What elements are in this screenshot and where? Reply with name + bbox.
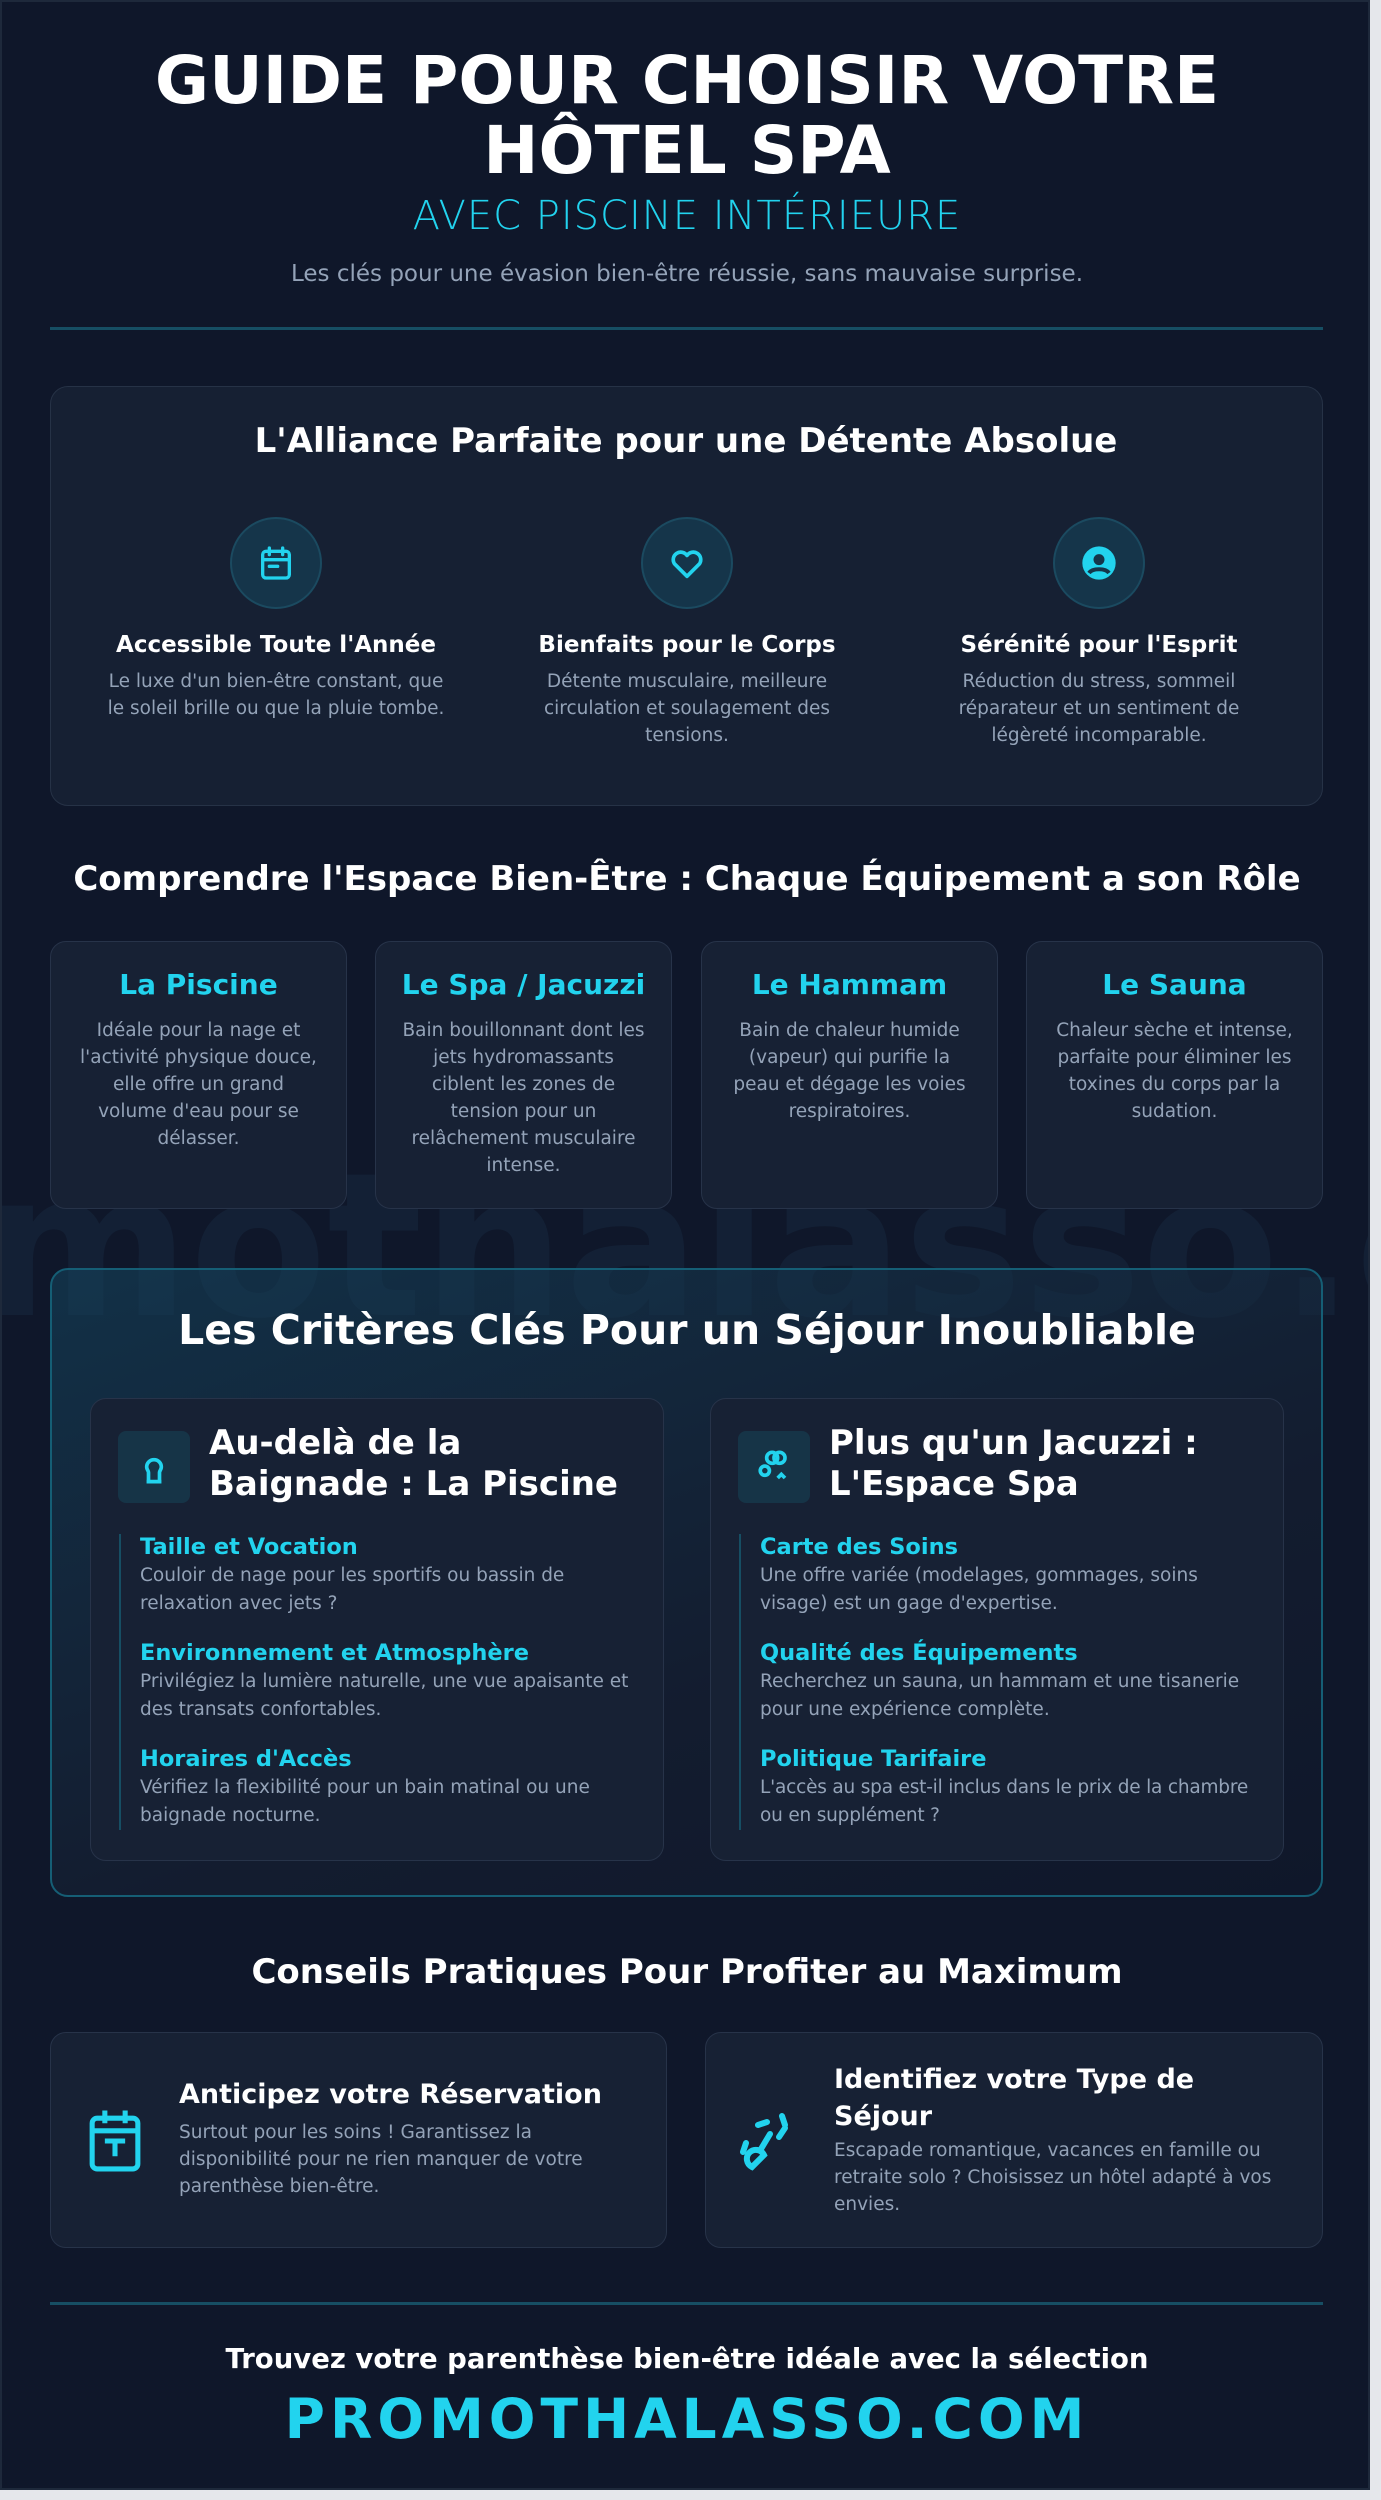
item: corps: Détente musculaire, meilleure circulation et soulagement des tensions. [544, 671, 830, 746]
card: sejour: Escapade romantique, vacances en famille ou retraite solo ? Choisissez un hôtel adapté à vos envies. [834, 2140, 1271, 2215]
list: Taille et Vocation [140, 1534, 358, 1560]
heading: espace: Comprendre l'Espace Bien-Être : Chaque Équipement a son Rôle [73, 859, 1301, 899]
item: corps: Bienfaits pour le Corps [538, 632, 836, 658]
subtitle: AVEC PISCINE INTÉRIEURE [413, 193, 961, 239]
list: Politique Tarifaire [760, 1746, 987, 1772]
card: piscine [50, 941, 347, 1209]
item: accessible [108, 517, 444, 719]
heading: Les Critères Clés Pour un Séjour Inoubliable [178, 1306, 1196, 1354]
subcard: spa [710, 1398, 1284, 1861]
icon: heart [641, 517, 733, 609]
heading: L'Alliance Parfaite pour une Détente Absolue [255, 421, 1117, 461]
list: Privilégiez la lumière naturelle, une vue apaisante et des transats confortables. [140, 1671, 628, 1720]
title [155, 42, 1219, 189]
list: Environnement et Atmosphère [140, 1640, 529, 1666]
card: spa: Bain bouillonnant dont les jets hydromassants ciblent les zones de tension pour un relâchement musculaire intense. [402, 1020, 645, 1176]
title: HÔTEL SPA [483, 112, 891, 189]
footer text: Trouvez votre parenthèse bien-être idéale avec la sélection [226, 2343, 1148, 2375]
card: spa: Le Spa / Jacuzzi [402, 968, 645, 1001]
subcard: piscine: Baignade : La Piscine [209, 1464, 618, 1504]
item: esprit: Réduction du stress, sommeil réparateur et un sentiment de légèreté incomparable. [959, 671, 1239, 746]
subcard: spa: Plus qu'un Jacuzzi : [829, 1423, 1198, 1463]
icon: spa [738, 1431, 810, 1503]
card: sauna: Chaleur sèche et intense, parfaite pour éliminer les toxines du corps par la sudation. [1056, 1020, 1293, 1122]
list: Recherchez un sauna, un hammam et une tisanerie pour une expérience complète. [760, 1671, 1239, 1720]
icon: calendar [90, 2110, 140, 2172]
list: Vérifiez la flexibilité pour un bain matinal ou une baignade nocturne. [140, 1777, 590, 1826]
title: GUIDE POUR CHOISIR VOTRE [155, 42, 1219, 119]
icon: calendar [230, 517, 322, 609]
card: reservation [50, 2032, 667, 2248]
heading: conseils: Conseils Pratiques Pour Profiter au Maximum [251, 1952, 1123, 1992]
list: Une offre variée (modelages, gommages, soins visage) est un gage d'expertise. [760, 1565, 1198, 1614]
list [119, 1534, 649, 1830]
icon: user [1053, 517, 1145, 609]
icon: pool [118, 1431, 190, 1503]
item: corps [538, 517, 836, 746]
card: sauna [1026, 941, 1323, 1209]
tagline: Les clés pour une évasion bien-être réussie, sans mauvaise surprise. [291, 261, 1083, 287]
panel: alliance [50, 386, 1323, 806]
item: accessible: Accessible Toute l'Année [116, 632, 436, 658]
footer brand: PROMOTHALASSO.COM [285, 2387, 1089, 2451]
card: spa [375, 941, 672, 1209]
card: sauna: Le Sauna [1102, 968, 1247, 1001]
card: hammam: Le Hammam [752, 968, 947, 1001]
list: L'accès au spa est-il inclus dans le prix de la chambre ou en supplément ? [760, 1777, 1248, 1826]
item: esprit [959, 517, 1239, 746]
list: Horaires d'Accès [140, 1746, 352, 1772]
list: Qualité des Équipements [760, 1640, 1078, 1666]
list [739, 1534, 1259, 1830]
card: sejour [705, 2032, 1323, 2248]
subcard: piscine [90, 1398, 664, 1861]
card: piscine: Idéale pour la nage et l'activité physique douce, elle offre un grand volume d'eau pour se délasser. [80, 1020, 317, 1149]
subcard: spa: L'Espace Spa [829, 1464, 1079, 1504]
card: sejour: Identifiez votre Type de Séjour [834, 2064, 1194, 2132]
list: Carte des Soins [760, 1534, 958, 1560]
icon: leaves [740, 2113, 788, 2171]
panel: criteres [50, 1268, 1323, 1897]
item: accessible: Le luxe d'un bien-être constant, que le soleil brille ou que la pluie tombe. [108, 671, 444, 719]
item: esprit: Sérénité pour l'Esprit [961, 632, 1237, 658]
card: reservation: Anticipez votre Réservation [179, 2079, 602, 2110]
card: piscine: La Piscine [119, 968, 278, 1001]
card: reservation: Surtout pour les soins ! Garantissez la disponibilité pour ne rien manquer de votre parenthèse bien-être. [179, 2122, 583, 2197]
subcard: piscine: Au-delà de la [209, 1423, 461, 1463]
card: hammam [701, 941, 998, 1209]
list: Couloir de nage pour les sportifs ou bassin de relaxation avec jets ? [140, 1565, 564, 1614]
card: hammam: Bain de chaleur humide (vapeur) qui purifie la peau et dégage les voies respiratoires. [733, 1020, 966, 1122]
